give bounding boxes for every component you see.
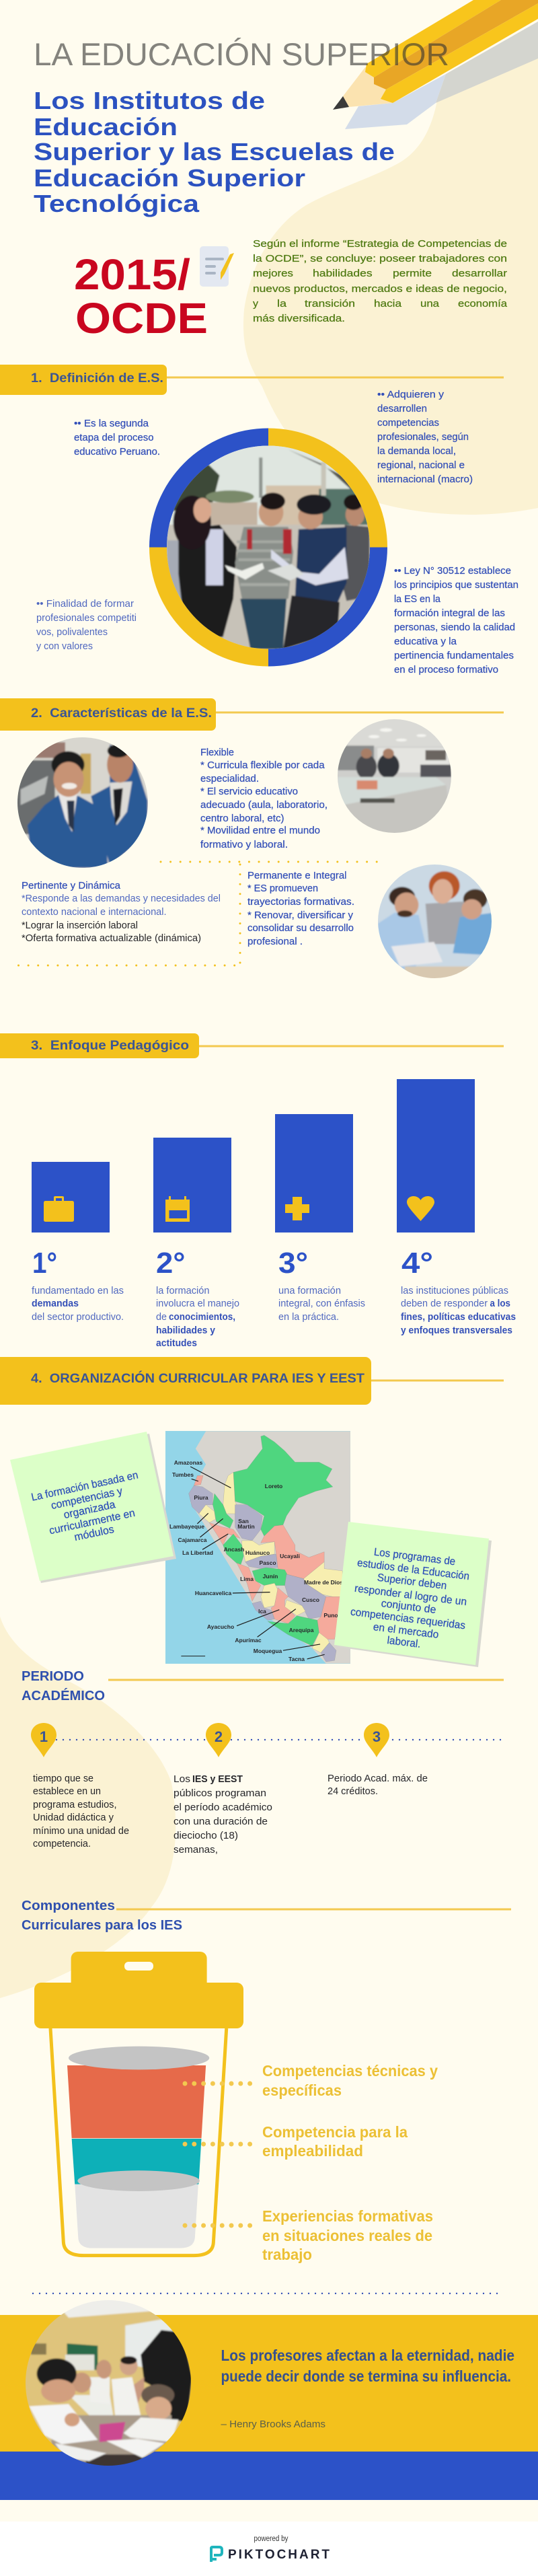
photo: students walking <box>167 445 370 649</box>
dotted divider: horizontal lower <box>19 965 242 966</box>
map of Peru: Huánuco <box>245 1549 270 1556</box>
map of Peru: Arequipa <box>289 1627 314 1633</box>
icon: pencil <box>333 0 538 129</box>
text: Permanente e Integral: Permanente e Integral <box>247 871 347 881</box>
cup ellipse bottom <box>77 2170 200 2191</box>
text: period credits: 24 créditos. <box>328 1786 378 1797</box>
white footer background <box>0 2522 538 2576</box>
text block: OCDE report: y <box>253 298 259 309</box>
section heading 3: 3. Enfoque Pedagógico <box>31 1039 189 1053</box>
column 1: first step: 1° <box>32 1247 57 1280</box>
text: purpose: vos, polivalentes <box>36 627 108 638</box>
label: employability <box>262 2123 408 2160</box>
heading: Componentes Curriculares <box>22 1899 182 1933</box>
text block: OCDE report: Según el informe “Estrategia de Competencias de <box>253 238 507 250</box>
photo: two uniformed students <box>13 735 151 870</box>
text: purpose <box>36 599 137 652</box>
column 2: second step <box>156 1247 239 1349</box>
text: Permanente e Integral: profesional . <box>247 936 303 947</box>
text: Ley 30512: los principios que sustentan <box>394 580 518 591</box>
text: Permanente e Integral: consolidar su desarrollo <box>247 923 354 934</box>
text: competencies: profesionales, según <box>377 432 469 443</box>
text: Flexible: * Curricula flexible por cada <box>200 760 325 771</box>
icon: notes and pencil <box>200 246 234 287</box>
text block: OCDE report: transición <box>305 298 355 309</box>
sticky note: study programs: laboral. <box>387 1635 421 1650</box>
column 1: first step <box>32 1247 124 1323</box>
text: period definition: competencia. <box>33 1839 91 1849</box>
text block: OCDE report: la <box>277 298 287 309</box>
text: period definition: programa estudios, <box>33 1800 117 1810</box>
label: technical competencies: específicas <box>262 2082 342 2099</box>
sticky note: competency training: La formación basada en <box>30 1469 139 1504</box>
yellow footer band <box>0 2315 538 2452</box>
text: Flexible: * Movilidad entre el mundo <box>200 825 320 836</box>
map of Peru: Ica <box>258 1608 266 1615</box>
column 2: second step: la formación <box>156 1286 210 1296</box>
heading: institutes and schools: Educación <box>34 113 178 141</box>
label: employability: empleabilidad <box>262 2142 363 2160</box>
photo: office team <box>376 863 494 980</box>
column 3: third step <box>278 1247 365 1323</box>
column 1: first step: demandas <box>32 1298 79 1309</box>
column 2: second step: conocimientos, <box>169 1312 235 1323</box>
column 4: fourth step: las instituciones públicas <box>401 1286 508 1296</box>
map of Peru: Ucayali <box>280 1553 300 1559</box>
text: Flexible: formativo y laboral. <box>200 840 288 850</box>
text: Pertinente y Dinámica <box>22 881 221 944</box>
sticky note: competency training: curricularmente en <box>48 1508 136 1537</box>
label: employability: Competencia para la <box>262 2123 408 2141</box>
map of Peru: Amazonas <box>174 1459 203 1466</box>
text: period credits <box>328 1773 428 1797</box>
sticky note: competency training: módulos <box>73 1524 115 1543</box>
text: competencies: competencias <box>377 418 439 429</box>
column 4: fourth step: deben de responder <box>401 1298 488 1309</box>
label: work experience: trabajo <box>262 2246 312 2263</box>
text: period duration: IES y EEST <box>192 1774 243 1785</box>
text block: OCDE report: la OCDE”, se concluye: poseer trabajadores con <box>253 253 507 264</box>
sticky note: competency training: competencias y <box>50 1485 124 1512</box>
column 3: third step: 3° <box>278 1247 308 1280</box>
text: Flexible <box>200 747 328 850</box>
timeline pin 2 <box>206 1723 231 1757</box>
map of Peru <box>165 1431 350 1664</box>
column 3: third step: en la práctica. <box>278 1312 339 1323</box>
map of Peru: Apurímac <box>235 1637 262 1644</box>
sticky note: study programs: competencias requeridas <box>350 1607 466 1631</box>
quote <box>221 2347 514 2385</box>
timeline pin 1: 1 <box>40 1728 48 1745</box>
column 4: fourth step: fines, políticas educativas <box>401 1312 516 1323</box>
column 1: first step: fundamentado en las <box>32 1286 124 1296</box>
column 4: fourth step: a los <box>490 1298 510 1309</box>
text: period duration: semanas, <box>174 1845 218 1855</box>
heading: Periodo Académico: PERIODO <box>22 1669 84 1684</box>
sticky note: study programs: responder al logro de un <box>354 1583 467 1608</box>
diagram: cup with layers <box>34 1952 243 2256</box>
text: purpose: y con valores <box>36 641 93 652</box>
cup layer: gray base <box>75 2184 198 2248</box>
text: period duration: con una duración de <box>174 1816 268 1827</box>
section heading 4: 4. ORGANIZACIÓN CURRICULAR PARA IES Y EEST <box>31 1371 364 1386</box>
text: Pertinente y Dinámica: *Lograr la inserción laboral <box>22 920 138 931</box>
map of Peru: Lima <box>240 1576 254 1582</box>
bar 1 with briefcase icon <box>32 1162 110 1232</box>
text: purpose: •• Finalidad de formar <box>36 599 134 610</box>
text: period credits: Periodo Acad. máx. de <box>328 1773 428 1784</box>
cup lid <box>34 1952 243 2028</box>
text: Pertinente y Dinámica: Pertinente y Dinámica <box>22 881 121 891</box>
text block: OCDE report: desarrollar <box>452 268 507 279</box>
text: Permanente e Integral: * Renovar, diversificar y <box>247 910 354 921</box>
heading: Componentes Curriculares: Componentes <box>22 1899 115 1913</box>
section heading 4 <box>0 1357 504 1405</box>
quote: Los profesores afectan a la eternidad, nadie <box>221 2347 514 2364</box>
bar 4 with heart icon <box>397 1079 475 1232</box>
text: Flexible: Flexible <box>200 747 234 758</box>
map of Peru: La Libertad <box>182 1549 213 1556</box>
sticky note: competency training: organizada <box>63 1499 116 1521</box>
blue footer band <box>0 2452 538 2500</box>
text block: OCDE report: mejores <box>253 268 293 279</box>
column 3: third step: una formación <box>278 1286 341 1296</box>
timeline pin 3 <box>364 1723 389 1757</box>
map of Peru: Tacna <box>289 1656 305 1662</box>
text: period definition: Unidad didáctica y <box>33 1812 114 1823</box>
quote: puede decir donde se termina su influencia. <box>221 2367 511 2385</box>
powered by label: powered by <box>254 2535 289 2543</box>
text block: OCDE report <box>253 238 508 324</box>
text: Pertinente y Dinámica: *Responde a las demandas y necesidades del <box>22 893 221 904</box>
section heading 1 <box>0 365 504 395</box>
bar 2 with calendar icon <box>153 1138 231 1232</box>
Piktochart logo: PIKTOCHART <box>228 2548 330 2562</box>
column 1: first step: del sector productivo. <box>32 1312 124 1323</box>
heading: institutes and schools: Educación Superior <box>34 164 305 192</box>
text: Ley 30512: formación integral de las <box>394 608 505 619</box>
text block: OCDE report: una <box>420 298 440 309</box>
column 4: fourth step: y enfoques transversales <box>401 1325 512 1336</box>
column 2: second step: de <box>156 1312 167 1323</box>
map of Peru: Junín <box>263 1573 278 1580</box>
text: competencies: internacional (macro) <box>377 474 473 485</box>
text: Ley 30512 <box>394 566 518 675</box>
stat: 2015 OCDE: OCDE <box>75 294 208 342</box>
text: competencies: •• Adquieren y <box>377 390 445 400</box>
label: work experience: Experiencias formativas <box>262 2207 433 2225</box>
text block: OCDE report: más diversificada. <box>253 313 345 324</box>
text: period duration: el período académico <box>174 1802 272 1813</box>
sticky note: study programs: conjunto de <box>381 1598 436 1616</box>
text: Ley 30512: en el proceso formativo <box>394 665 498 675</box>
dotted leader 2 <box>185 2142 250 2146</box>
text: second stage: educativo Peruano. <box>74 447 160 457</box>
circular ring with photo <box>147 428 388 668</box>
text: Pertinente y Dinámica: contexto nacional e internacional. <box>22 907 167 918</box>
sticky note: study programs: Superior deben <box>377 1572 447 1592</box>
text block: OCDE report: permite <box>393 268 432 279</box>
column 2: second step: actitudes <box>156 1338 197 1349</box>
heading: institutes and schools: Tecnológica <box>34 190 200 217</box>
text: period duration: Los <box>174 1774 190 1785</box>
stat: 2015 OCDE: 2015/ <box>74 250 190 299</box>
text: second stage: etapa del proceso <box>74 433 153 443</box>
cup ellipse top <box>69 2047 209 2069</box>
sticky note: competency training <box>10 1432 176 1583</box>
cup layer: teal <box>72 2139 201 2184</box>
stat: 2015 OCDE <box>74 250 208 342</box>
dotted divider: vertical <box>239 864 241 963</box>
sticky note: study programs: Los programas de <box>373 1547 456 1568</box>
text: competencies <box>377 390 473 485</box>
text: competencies: regional, nacional e <box>377 460 465 471</box>
bar 3 with plus icon <box>275 1114 353 1232</box>
map of Peru: Piura <box>194 1494 208 1501</box>
text: period duration <box>174 1774 272 1855</box>
background blob: top right <box>243 57 538 515</box>
label: work experience: en situaciones reales de <box>262 2227 432 2244</box>
section heading 2: 2. Características de la E.S. <box>31 706 212 721</box>
text: period definition <box>33 1773 129 1849</box>
text: Ley 30512: la ES en la <box>394 594 441 605</box>
column 4: fourth step: 4° <box>401 1247 433 1280</box>
heading rule: Componentes <box>116 1908 511 1911</box>
text: competencies: la demanda local, <box>377 446 456 457</box>
text block: OCDE report: economía <box>458 298 508 309</box>
text: Flexible: centro laboral, etc) <box>200 813 284 824</box>
section heading 1: 1. Definición de E.S. <box>31 371 163 385</box>
heading: Periodo Académico <box>22 1669 105 1703</box>
text: period definition: establece en un <box>33 1786 101 1797</box>
heading: institutes and schools: Los Institutos de <box>34 87 265 114</box>
map of Peru: Madre de Dios <box>304 1579 343 1586</box>
text: Flexible: * El servicio educativo <box>200 786 298 797</box>
text: Pertinente y Dinámica: *Oferta formativa actualizable (dinámica) <box>22 933 201 944</box>
map of Peru: Huancavelica <box>195 1590 231 1596</box>
text: Permanente e Integral: * ES promueven <box>247 883 318 894</box>
column 3: third step: integral, con énfasis <box>278 1298 365 1309</box>
background blob: lower left <box>0 1617 176 1998</box>
text: Ley 30512: •• Ley N° 30512 establece <box>394 566 511 577</box>
dotted divider: horizontal upper <box>161 861 385 862</box>
heading rule: Periodo <box>108 1679 504 1681</box>
map of Peru: Pasco <box>259 1559 276 1566</box>
map of Peru: Martin <box>237 1523 255 1530</box>
map of Peru: Moquegua <box>254 1648 282 1654</box>
quote attribution: – Henry Brooks Adams <box>221 2419 325 2430</box>
cup layer: orange <box>67 2065 206 2138</box>
text: period duration: dieciocho (18) <box>174 1831 238 1841</box>
column 2: second step: involucra el manejo <box>156 1298 239 1309</box>
map of Peru: San <box>238 1518 249 1524</box>
photo: classroom <box>21 2299 196 2469</box>
heading: Periodo Académico: ACADÉMICO <box>22 1688 105 1703</box>
text: second stage <box>74 418 160 457</box>
timeline pin 3: 3 <box>373 1728 381 1745</box>
text: Ley 30512: personas, siendo la calidad <box>394 622 515 633</box>
text: competencies: desarrollen <box>377 404 427 414</box>
text: Flexible: especialidad. <box>200 774 259 784</box>
title: LA EDUCACIÓN SUPERIOR <box>34 36 449 73</box>
column 2: second step: habilidades y <box>156 1325 215 1336</box>
heading: Componentes Curriculares: Curriculares para los IES <box>22 1918 182 1933</box>
dotted leader 3 <box>185 2223 250 2228</box>
map of Peru: Tumbes <box>172 1471 194 1478</box>
text: Permanente e Integral: trayectorias formativas. <box>247 897 354 908</box>
text block: OCDE report: hacia <box>374 298 402 309</box>
timeline pin 2: 2 <box>215 1728 223 1745</box>
text: Ley 30512: pertinencia fundamentales <box>394 651 514 661</box>
map of Peru: Ayacucho <box>207 1623 234 1630</box>
map of Peru: Cusco <box>302 1596 319 1603</box>
text block: OCDE report: habilidades <box>313 268 373 279</box>
heading: institutes and schools: Superior y las Escuelas de <box>34 138 395 165</box>
map of Peru: Puno <box>323 1612 338 1619</box>
column 4: fourth step <box>401 1247 516 1336</box>
text: Flexible: adecuado (aula, laboratorio, <box>200 800 328 811</box>
label: work experience <box>262 2207 433 2263</box>
heading: institutes and schools <box>34 87 395 217</box>
cup outline <box>50 2028 227 2256</box>
text: Ley 30512: educativa y la <box>394 636 457 647</box>
text: period duration: públicos programan <box>174 1788 266 1799</box>
sticky note: study programs: en el mercado <box>373 1621 439 1641</box>
photo: meeting room <box>336 718 453 834</box>
text: Permanente e Integral <box>247 871 354 947</box>
dotted divider above footer <box>33 2293 499 2294</box>
text: purpose: profesionales competiti <box>36 613 137 624</box>
text: period definition: tiempo que se <box>33 1773 93 1784</box>
text: period definition: mínimo una unidad de <box>33 1826 129 1837</box>
timeline pin 1 <box>31 1723 56 1757</box>
text block: OCDE report: nuevos productos, mercados e ideas de negocio, <box>253 283 507 295</box>
map of Peru: Loreto <box>265 1483 282 1489</box>
map of Peru: Lambayeque <box>169 1523 204 1530</box>
map of Peru: Cajamarca <box>178 1537 207 1543</box>
column 2: second step: 2° <box>156 1247 186 1280</box>
section heading 2 <box>0 698 504 731</box>
text: second stage: •• Es la segunda <box>74 418 149 429</box>
label: technical competencies: Competencias técnicas y <box>262 2062 438 2080</box>
map of Peru: Ancash <box>224 1546 244 1553</box>
section heading 3 <box>0 1033 504 1058</box>
sticky note: study programs <box>334 1522 492 1667</box>
sticky note: study programs: estudios de la Educación <box>356 1557 470 1582</box>
dotted leader 1 <box>185 2082 250 2086</box>
dotted timeline <box>56 1739 501 1740</box>
label: technical competencies <box>262 2062 438 2099</box>
